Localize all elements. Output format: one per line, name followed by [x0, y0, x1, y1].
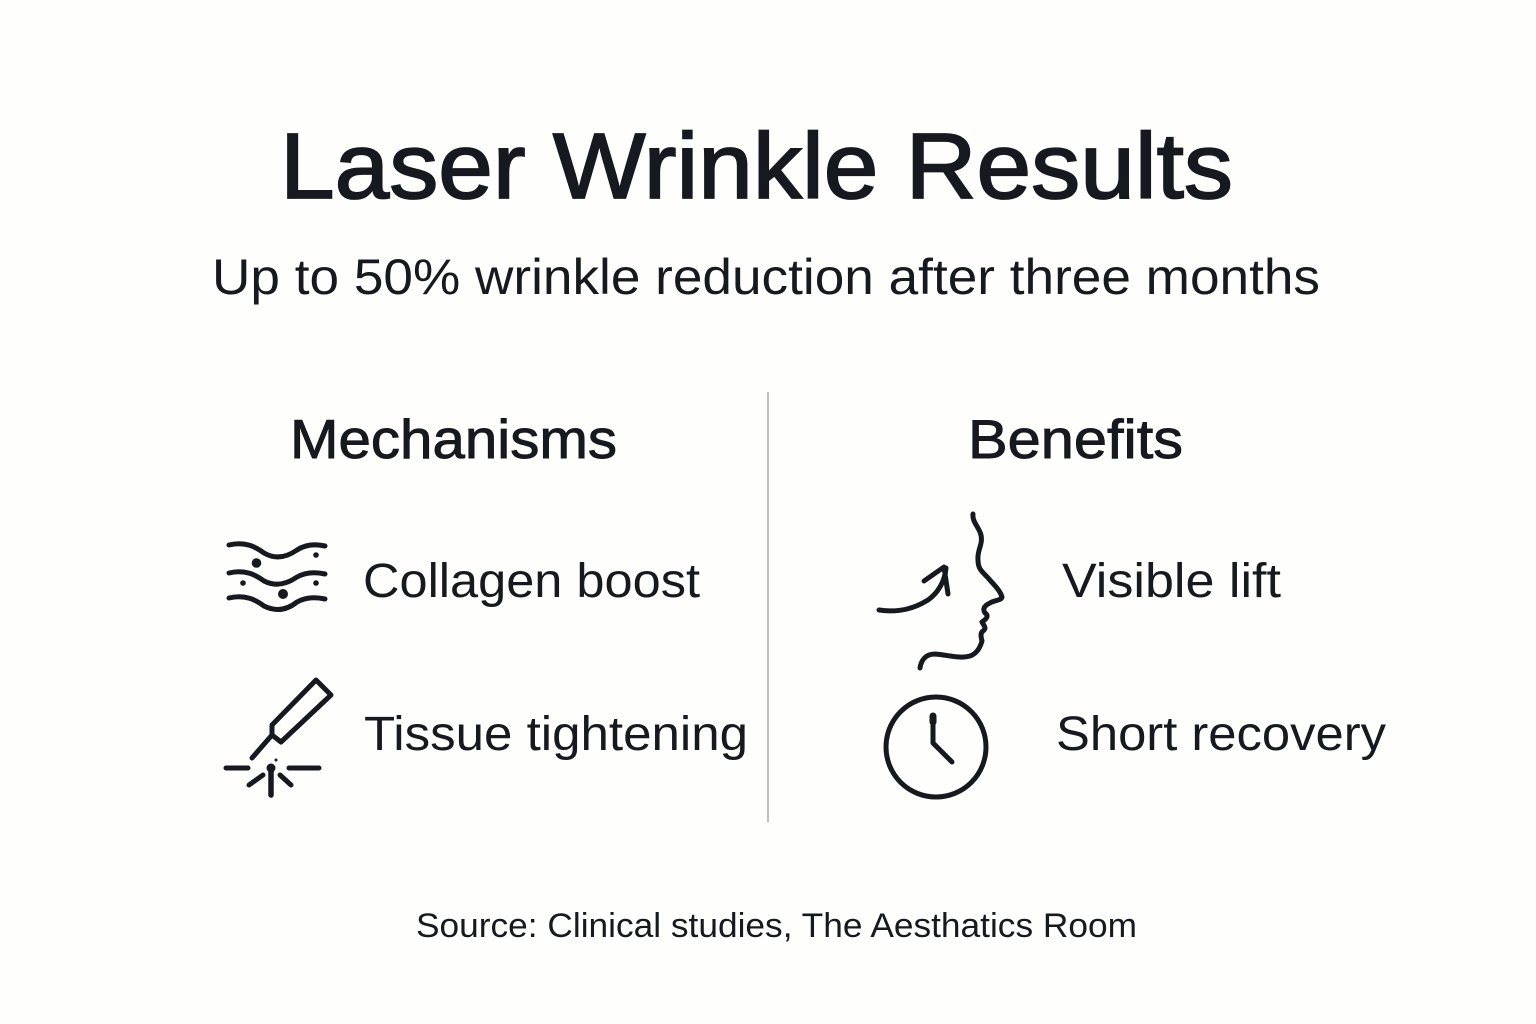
- icon: collagen waves: [229, 544, 325, 609]
- center divider: [767, 392, 769, 822]
- panel: mechanisms: [226, 408, 748, 795]
- icon: laser pen: [226, 680, 331, 795]
- label: tissue tightening: Tissue tightening: [364, 708, 748, 761]
- subtitle: Up to 50% wrinkle reduction after three months: [212, 249, 1320, 305]
- label: visible lift: Visible lift: [1062, 555, 1281, 608]
- panel: benefits: [879, 408, 1386, 797]
- heading: benefits: Benefits: [968, 408, 1183, 470]
- title: Laser Wrinkle Results: [280, 114, 1233, 218]
- label: collagen boost: Collagen boost: [363, 555, 700, 608]
- label: short recovery: Short recovery: [1056, 708, 1386, 761]
- source note: Source: Clinical studies, The Aesthatics Room: [416, 907, 1137, 945]
- heading: mechanisms: Mechanisms: [290, 408, 617, 470]
- icon: clock: [886, 697, 986, 797]
- icon: face profile with lift arrow: [879, 514, 1002, 668]
